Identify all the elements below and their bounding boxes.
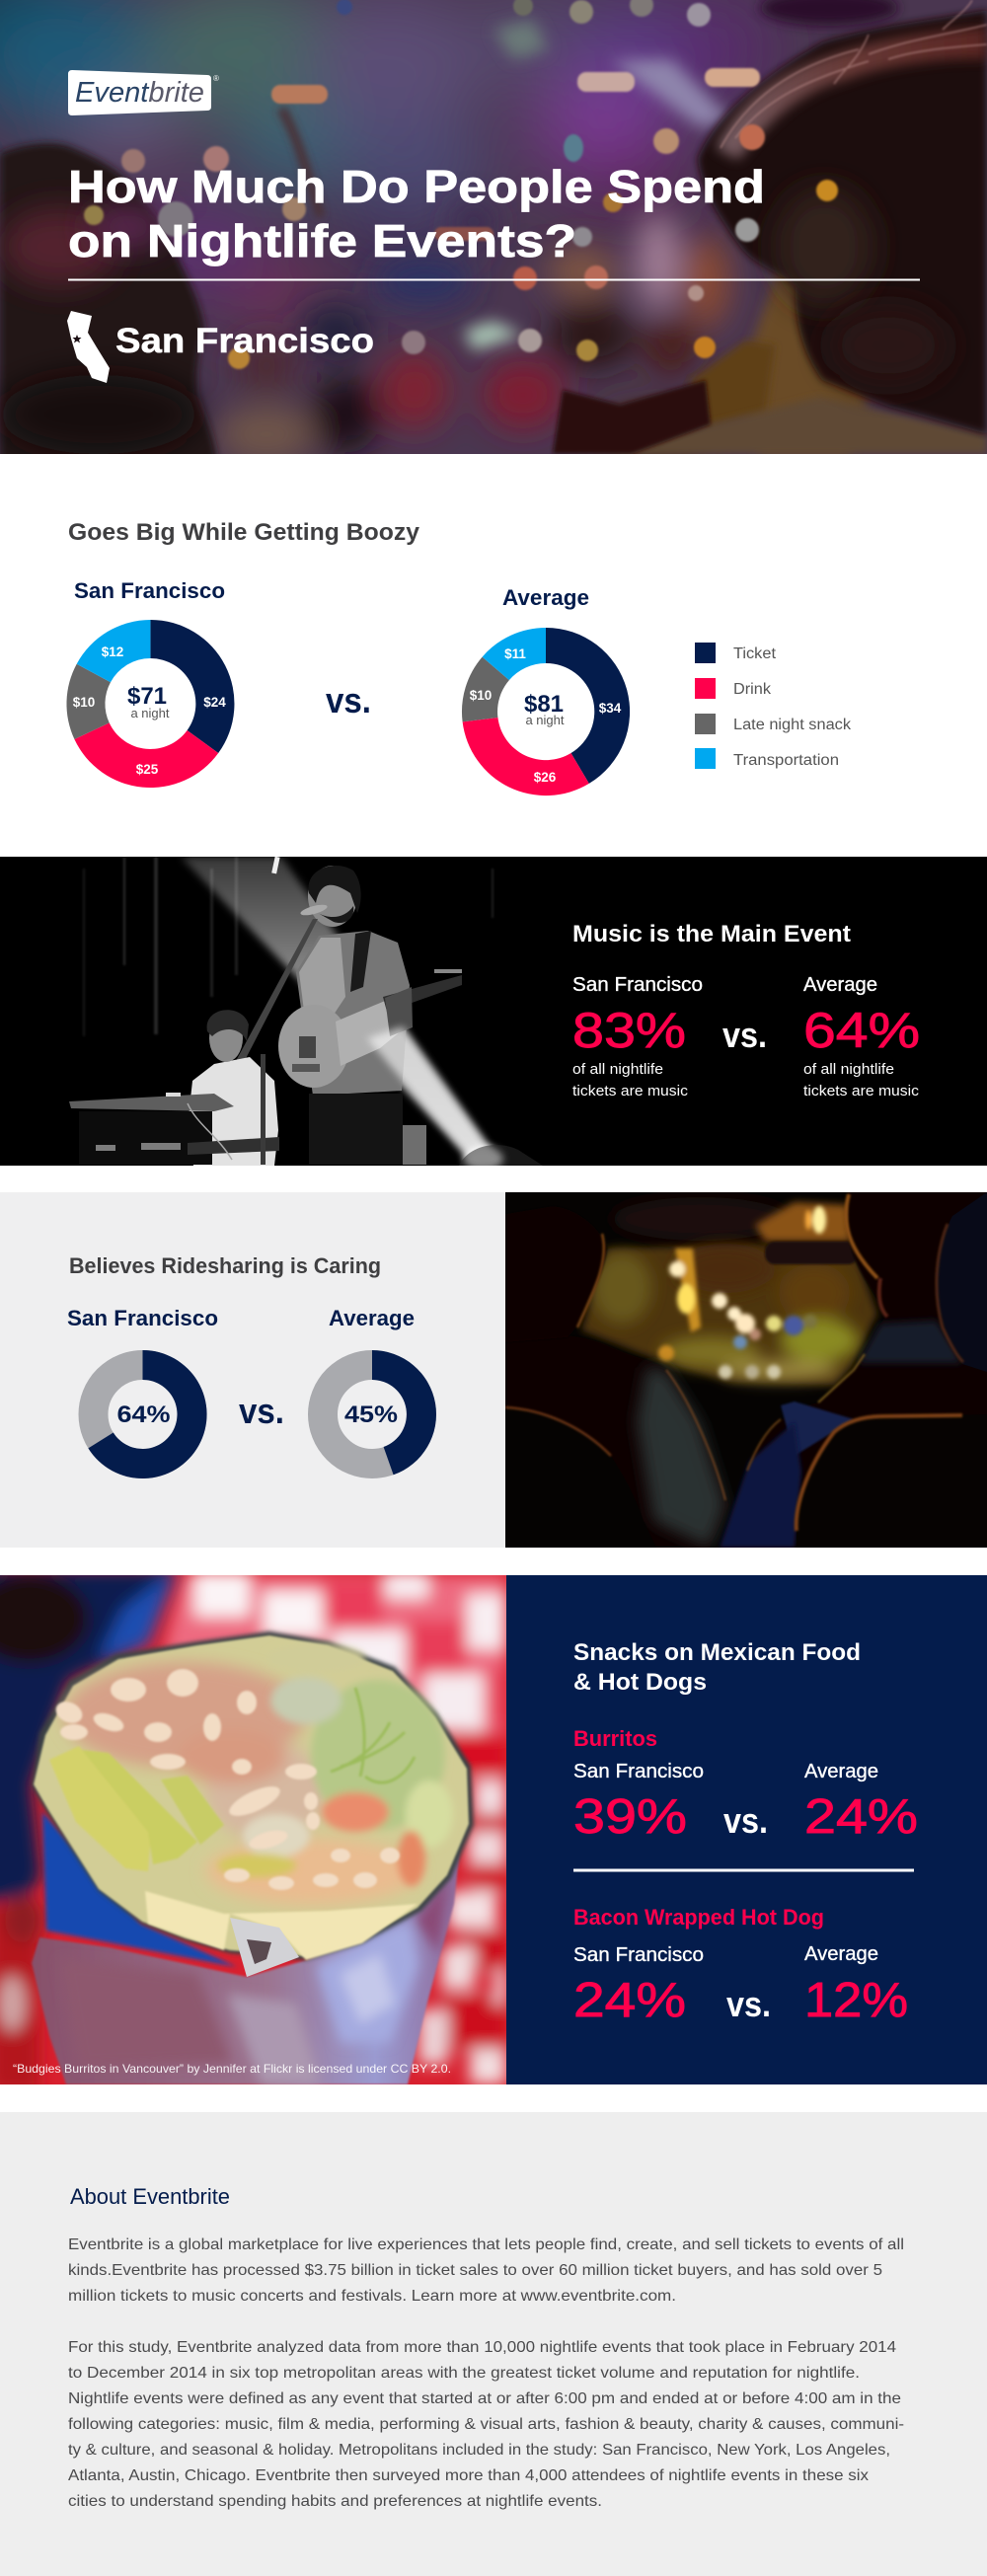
title: How Much Do People Spend bbox=[68, 161, 765, 212]
legend: Drink bbox=[733, 681, 771, 698]
photo: car interior at night bbox=[505, 1192, 987, 1548]
icon: California map bbox=[67, 311, 110, 383]
stat: burritos bbox=[573, 1726, 918, 1844]
stat: burritos: 39% bbox=[573, 1790, 687, 1844]
heading bbox=[573, 1639, 861, 1696]
donut chart: Average 45%: 45% bbox=[344, 1402, 398, 1428]
donut chart: San Francisco 64% bbox=[88, 1350, 207, 1478]
Average stat: tickets are music bbox=[803, 1083, 920, 1099]
city heading: San Francisco bbox=[115, 322, 374, 360]
donut chart: San Francisco 64%: 64% bbox=[116, 1402, 170, 1428]
donut chart: San Francisco: $12 bbox=[102, 644, 123, 659]
panel: music bbox=[0, 857, 987, 1171]
photo: burrito on checked paper bbox=[0, 1569, 506, 2092]
photo credit: “Budgies Burritos in Vancouver” by Jennifer at Flickr is licensed under CC BY 2.0. bbox=[13, 2062, 451, 2076]
Average stat: Average bbox=[803, 974, 877, 996]
legend: Transportation bbox=[733, 752, 839, 769]
stat: burritos: Average bbox=[804, 1761, 878, 1782]
text: company description bbox=[68, 2236, 904, 2305]
stat: bacon wrapped hot dog: Average bbox=[804, 1943, 878, 1965]
text: study methodology: Atlanta, Austin, Chicago. Eventbrite then surveyed more than 4,000 attendees of nightlife events in these six bbox=[68, 2467, 869, 2484]
San Francisco stat bbox=[572, 974, 703, 1099]
text: company description: kinds.Eventbrite has processed $3.75 billion in ticket sales to over 60 million ticket buyers, and has sold over 5 bbox=[68, 2262, 882, 2279]
vs label: vs. bbox=[722, 1015, 767, 1055]
keyboard player bbox=[69, 1010, 279, 1166]
label: San Francisco: San Francisco bbox=[67, 1306, 218, 1330]
vs label: vs. bbox=[326, 680, 371, 720]
dark blue backdrop bbox=[0, 1569, 178, 2092]
Average stat: of all nightlife bbox=[803, 1061, 894, 1078]
donut chart: San Francisco bbox=[66, 620, 234, 788]
donut chart: Average: $10 bbox=[470, 688, 492, 703]
title bbox=[68, 161, 765, 266]
panel: ridesharing bbox=[0, 1192, 987, 1548]
heading: Music is the Main Event bbox=[572, 921, 851, 947]
label: San Francisco: San Francisco bbox=[74, 578, 225, 603]
vs label: vs. bbox=[239, 1391, 284, 1431]
stat: bacon wrapped hot dog: Bacon Wrapped Hot Dog bbox=[573, 1905, 824, 1930]
legend: Ticket bbox=[733, 645, 777, 662]
stat: bacon wrapped hot dog: San Francisco bbox=[573, 1944, 704, 1966]
guitarist bbox=[230, 866, 462, 1165]
Average stat bbox=[803, 974, 920, 1099]
logo: Eventbrite bbox=[68, 70, 219, 115]
donut chart: San Francisco: $10 bbox=[73, 695, 95, 710]
legend: Late night snack bbox=[733, 717, 851, 733]
hero photo: blurred concert crowd bbox=[0, 0, 987, 464]
photo: band on stage bbox=[69, 857, 543, 1171]
heading: & Hot Dogs bbox=[573, 1669, 707, 1696]
donut chart: Average: $11 bbox=[504, 646, 526, 661]
right passenger bbox=[720, 1192, 987, 1548]
stat: burritos: 24% bbox=[804, 1790, 918, 1844]
text: study methodology: following categories: music, film & media, performing & visual arts, fashion & beauty, charity & causes, communi- bbox=[68, 2416, 904, 2433]
panel: about Eventbrite bbox=[0, 2112, 987, 2576]
text: study methodology: Nightlife events were defined as any event that started at or after 6:00 pm and ended at or before 4:00 am in the bbox=[68, 2390, 901, 2407]
heading: Snacks on Mexican Food bbox=[573, 1639, 861, 1666]
hanging arm bbox=[281, 109, 321, 217]
donut chart: San Francisco: a night bbox=[130, 706, 170, 720]
text: company description: Eventbrite is a global marketplace for live experiences that lets people find, create, and sell tickets to events of all bbox=[68, 2236, 904, 2253]
panel: hero header bbox=[0, 0, 987, 464]
left hair bbox=[0, 143, 217, 464]
light streaks bbox=[464, 20, 730, 350]
donut chart: Average: a night bbox=[525, 713, 565, 727]
donut chart: San Francisco: $71 bbox=[127, 683, 167, 710]
San Francisco stat: of all nightlife bbox=[572, 1061, 663, 1078]
checked paper bbox=[158, 1571, 506, 2084]
heading: Believes Ridesharing is Caring bbox=[69, 1253, 381, 1278]
stat: bacon wrapped hot dog: 24% bbox=[573, 1974, 686, 2027]
text: study methodology: to December 2014 in six top metropolitan areas with the greatest ticket volume and reputation for nightlife. bbox=[68, 2365, 860, 2382]
text: study methodology: ty & culture, and seasonal & holiday. Metropolitans included in the study: San Francisco, New York, Los Angeles, bbox=[68, 2442, 890, 2459]
bokeh lights bbox=[84, 0, 838, 369]
left passenger bbox=[505, 1206, 729, 1548]
donut chart: Average: $34 bbox=[599, 701, 622, 716]
label: Average: Average bbox=[502, 585, 589, 610]
label: Average: Average bbox=[329, 1306, 415, 1330]
stat: bacon wrapped hot dog: 12% bbox=[804, 1974, 908, 2027]
San Francisco stat: San Francisco bbox=[572, 974, 703, 996]
title: on Nightlife Events? bbox=[68, 215, 576, 266]
San Francisco stat: tickets are music bbox=[572, 1083, 689, 1099]
donut chart: Average: $81 bbox=[524, 691, 564, 718]
text: company description: million tickets to music concerts and festivals. Learn more at www.eventbrite.com. bbox=[68, 2288, 676, 2305]
donut chart: Average 45% bbox=[323, 1350, 436, 1475]
stat: burritos: vs. bbox=[723, 1800, 768, 1841]
donut chart: Average bbox=[462, 628, 630, 796]
stat: bacon wrapped hot dog bbox=[573, 1905, 908, 2027]
text: study methodology: For this study, Eventbrite analyzed data from more than 10,000 nightlife events that took place in February 2014 bbox=[68, 2339, 896, 2356]
burrito bbox=[32, 1631, 474, 1977]
text: study methodology: cities to understand spending habits and preferences at nightlife events. bbox=[68, 2493, 602, 2510]
donut chart: San Francisco: $25 bbox=[136, 762, 159, 777]
right head bbox=[612, 0, 987, 454]
stat: burritos: San Francisco bbox=[573, 1761, 704, 1782]
donut chart: San Francisco: $24 bbox=[203, 695, 226, 710]
foil wrap bbox=[32, 1839, 461, 2084]
logo: Eventbrite: Eventbrite bbox=[75, 77, 204, 109]
heading: About Eventbrite bbox=[70, 2184, 230, 2209]
panel: snacks bbox=[0, 1569, 987, 2092]
panel: spending per night bbox=[66, 519, 851, 796]
donut chart: Average: $26 bbox=[534, 770, 557, 785]
stat: bacon wrapped hot dog: vs. bbox=[726, 1984, 771, 2024]
logo: Eventbrite: ® bbox=[213, 74, 219, 83]
stat: burritos: Burritos bbox=[573, 1726, 657, 1751]
Average stat: 64% bbox=[803, 1003, 920, 1058]
San Francisco stat: 83% bbox=[572, 1003, 686, 1058]
text: study methodology bbox=[68, 2339, 904, 2510]
heading: Goes Big While Getting Boozy bbox=[68, 519, 420, 546]
legend bbox=[695, 643, 851, 769]
